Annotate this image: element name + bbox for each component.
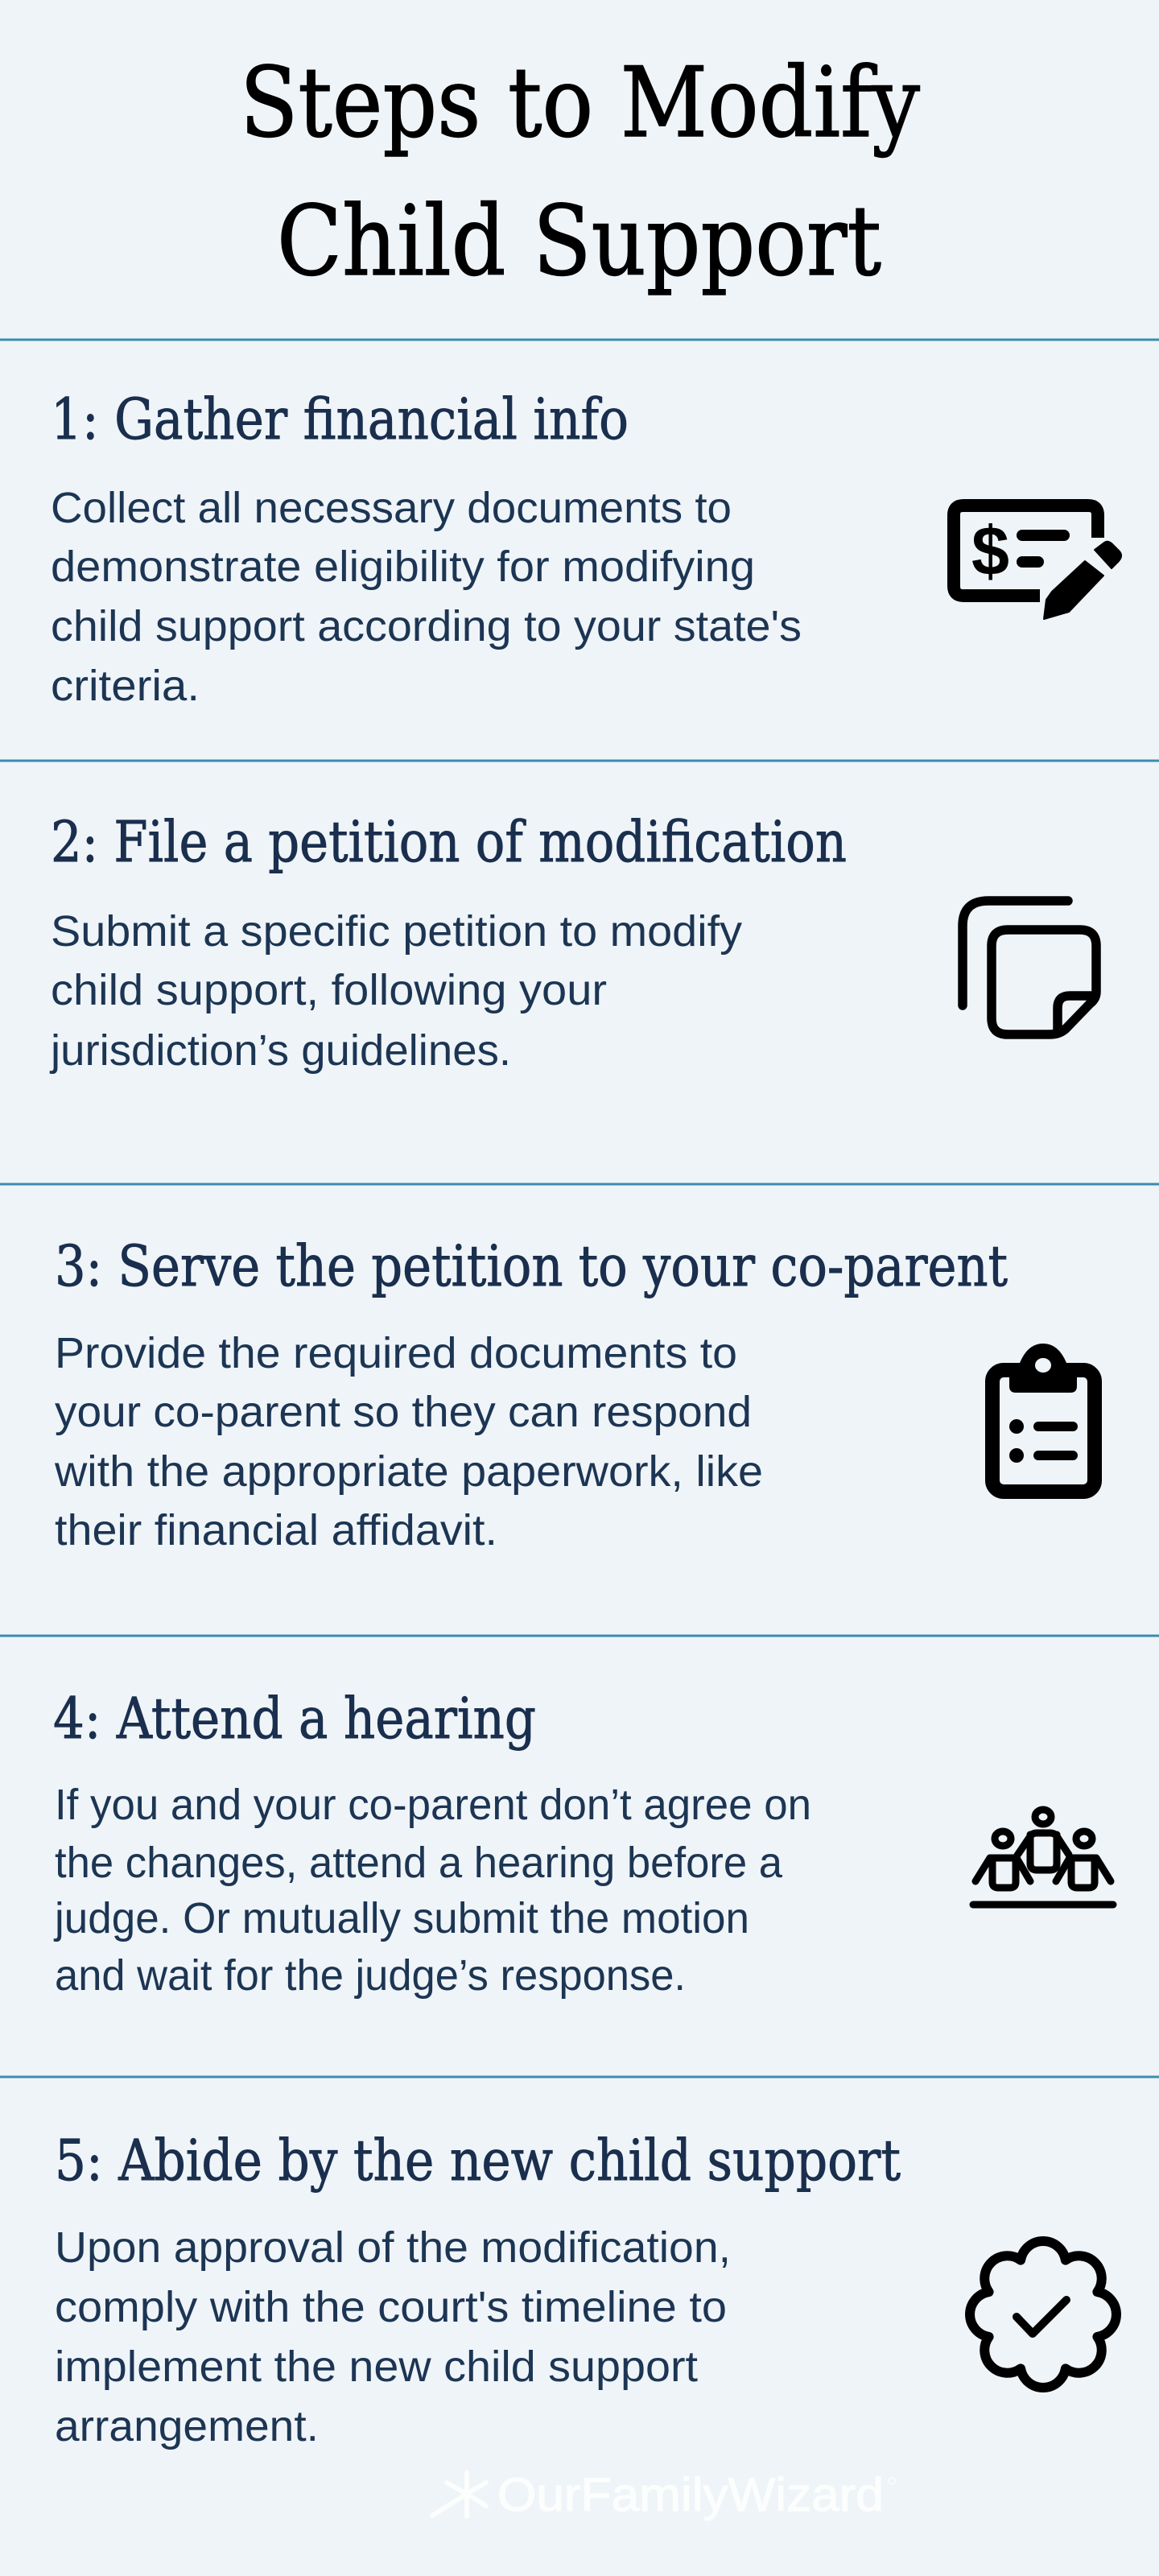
- step 2 body text: Submit a specific petition to modify: [51, 907, 742, 956]
- step 5 body text: [55, 2223, 731, 2450]
- step 4 body text: [53, 1781, 811, 2000]
- step 1 body text: criteria.: [51, 662, 200, 710]
- step 5 body text: arrangement.: [55, 2402, 319, 2450]
- step 3 body text: your co-parent so they can respond: [55, 1388, 752, 1436]
- step 2 body text: child support, following your: [51, 966, 607, 1014]
- icon: people at a table: [973, 1810, 1113, 1905]
- step 2 heading: 2: File a petition of modification: [51, 809, 847, 875]
- panel: step 4 attend a hearing: [53, 1686, 1113, 2000]
- step 3 body text: their financial affidavit.: [55, 1506, 497, 1554]
- step 5 body text: Upon approval of the modification,: [55, 2223, 731, 2272]
- step 3 body text: with the appropriate paperwork, like: [54, 1447, 763, 1496]
- step 2 body text: [49, 907, 742, 1075]
- title: Steps to Modify: [240, 47, 920, 159]
- step 1 body text: child support according to your state's: [51, 602, 802, 650]
- icon: sticky notes: [963, 901, 1096, 1034]
- step 4 heading: 4: Attend a hearing: [53, 1686, 536, 1752]
- step 1 body text: [51, 484, 802, 710]
- icon: cheque and pen: [954, 506, 1121, 619]
- icon: check badge: [970, 2241, 1116, 2388]
- step 3 heading: 3: Serve the petition to your co-parent: [55, 1233, 1008, 1299]
- logo: OurFamilyWizard watermark: OurFamilyWizard: [497, 2469, 884, 2521]
- step 4 body text: and wait for the judge’s response.: [55, 1951, 686, 2000]
- step 1 body text: Collect all necessary documents to: [51, 484, 732, 532]
- step 3 body text: [54, 1329, 763, 1554]
- step 4 body text: judge. Or mutually submit the motion: [53, 1894, 749, 1942]
- panel: step 1 gather financial info: [51, 386, 1121, 710]
- panel: step 2 file a petition: [49, 809, 1096, 1075]
- icon: cheque and pen: $: [971, 513, 1009, 590]
- step 1 body text: demonstrate eligibility for modifying: [51, 543, 755, 591]
- step 4 body text: If you and your co-parent don’t agree on: [55, 1781, 811, 1829]
- icon: clipboard: [992, 1344, 1095, 1492]
- panel: step 3 serve the petition: [54, 1233, 1095, 1554]
- panel: step 5 abide by the new child support: [55, 2128, 1116, 2450]
- step 2 body text: jurisdiction’s guidelines.: [49, 1026, 511, 1075]
- title: [240, 47, 920, 298]
- title: Child Support: [277, 186, 881, 298]
- step 5 body text: comply with the court's timeline to: [55, 2283, 727, 2331]
- step 5 body text: implement the new child support: [55, 2343, 698, 2391]
- step 4 body text: the changes, attend a hearing before a: [55, 1839, 783, 1887]
- step 5 heading: 5: Abide by the new child support: [55, 2128, 901, 2194]
- step 1 heading: 1: Gather financial info: [51, 386, 629, 452]
- step 3 body text: Provide the required documents to: [55, 1329, 737, 1377]
